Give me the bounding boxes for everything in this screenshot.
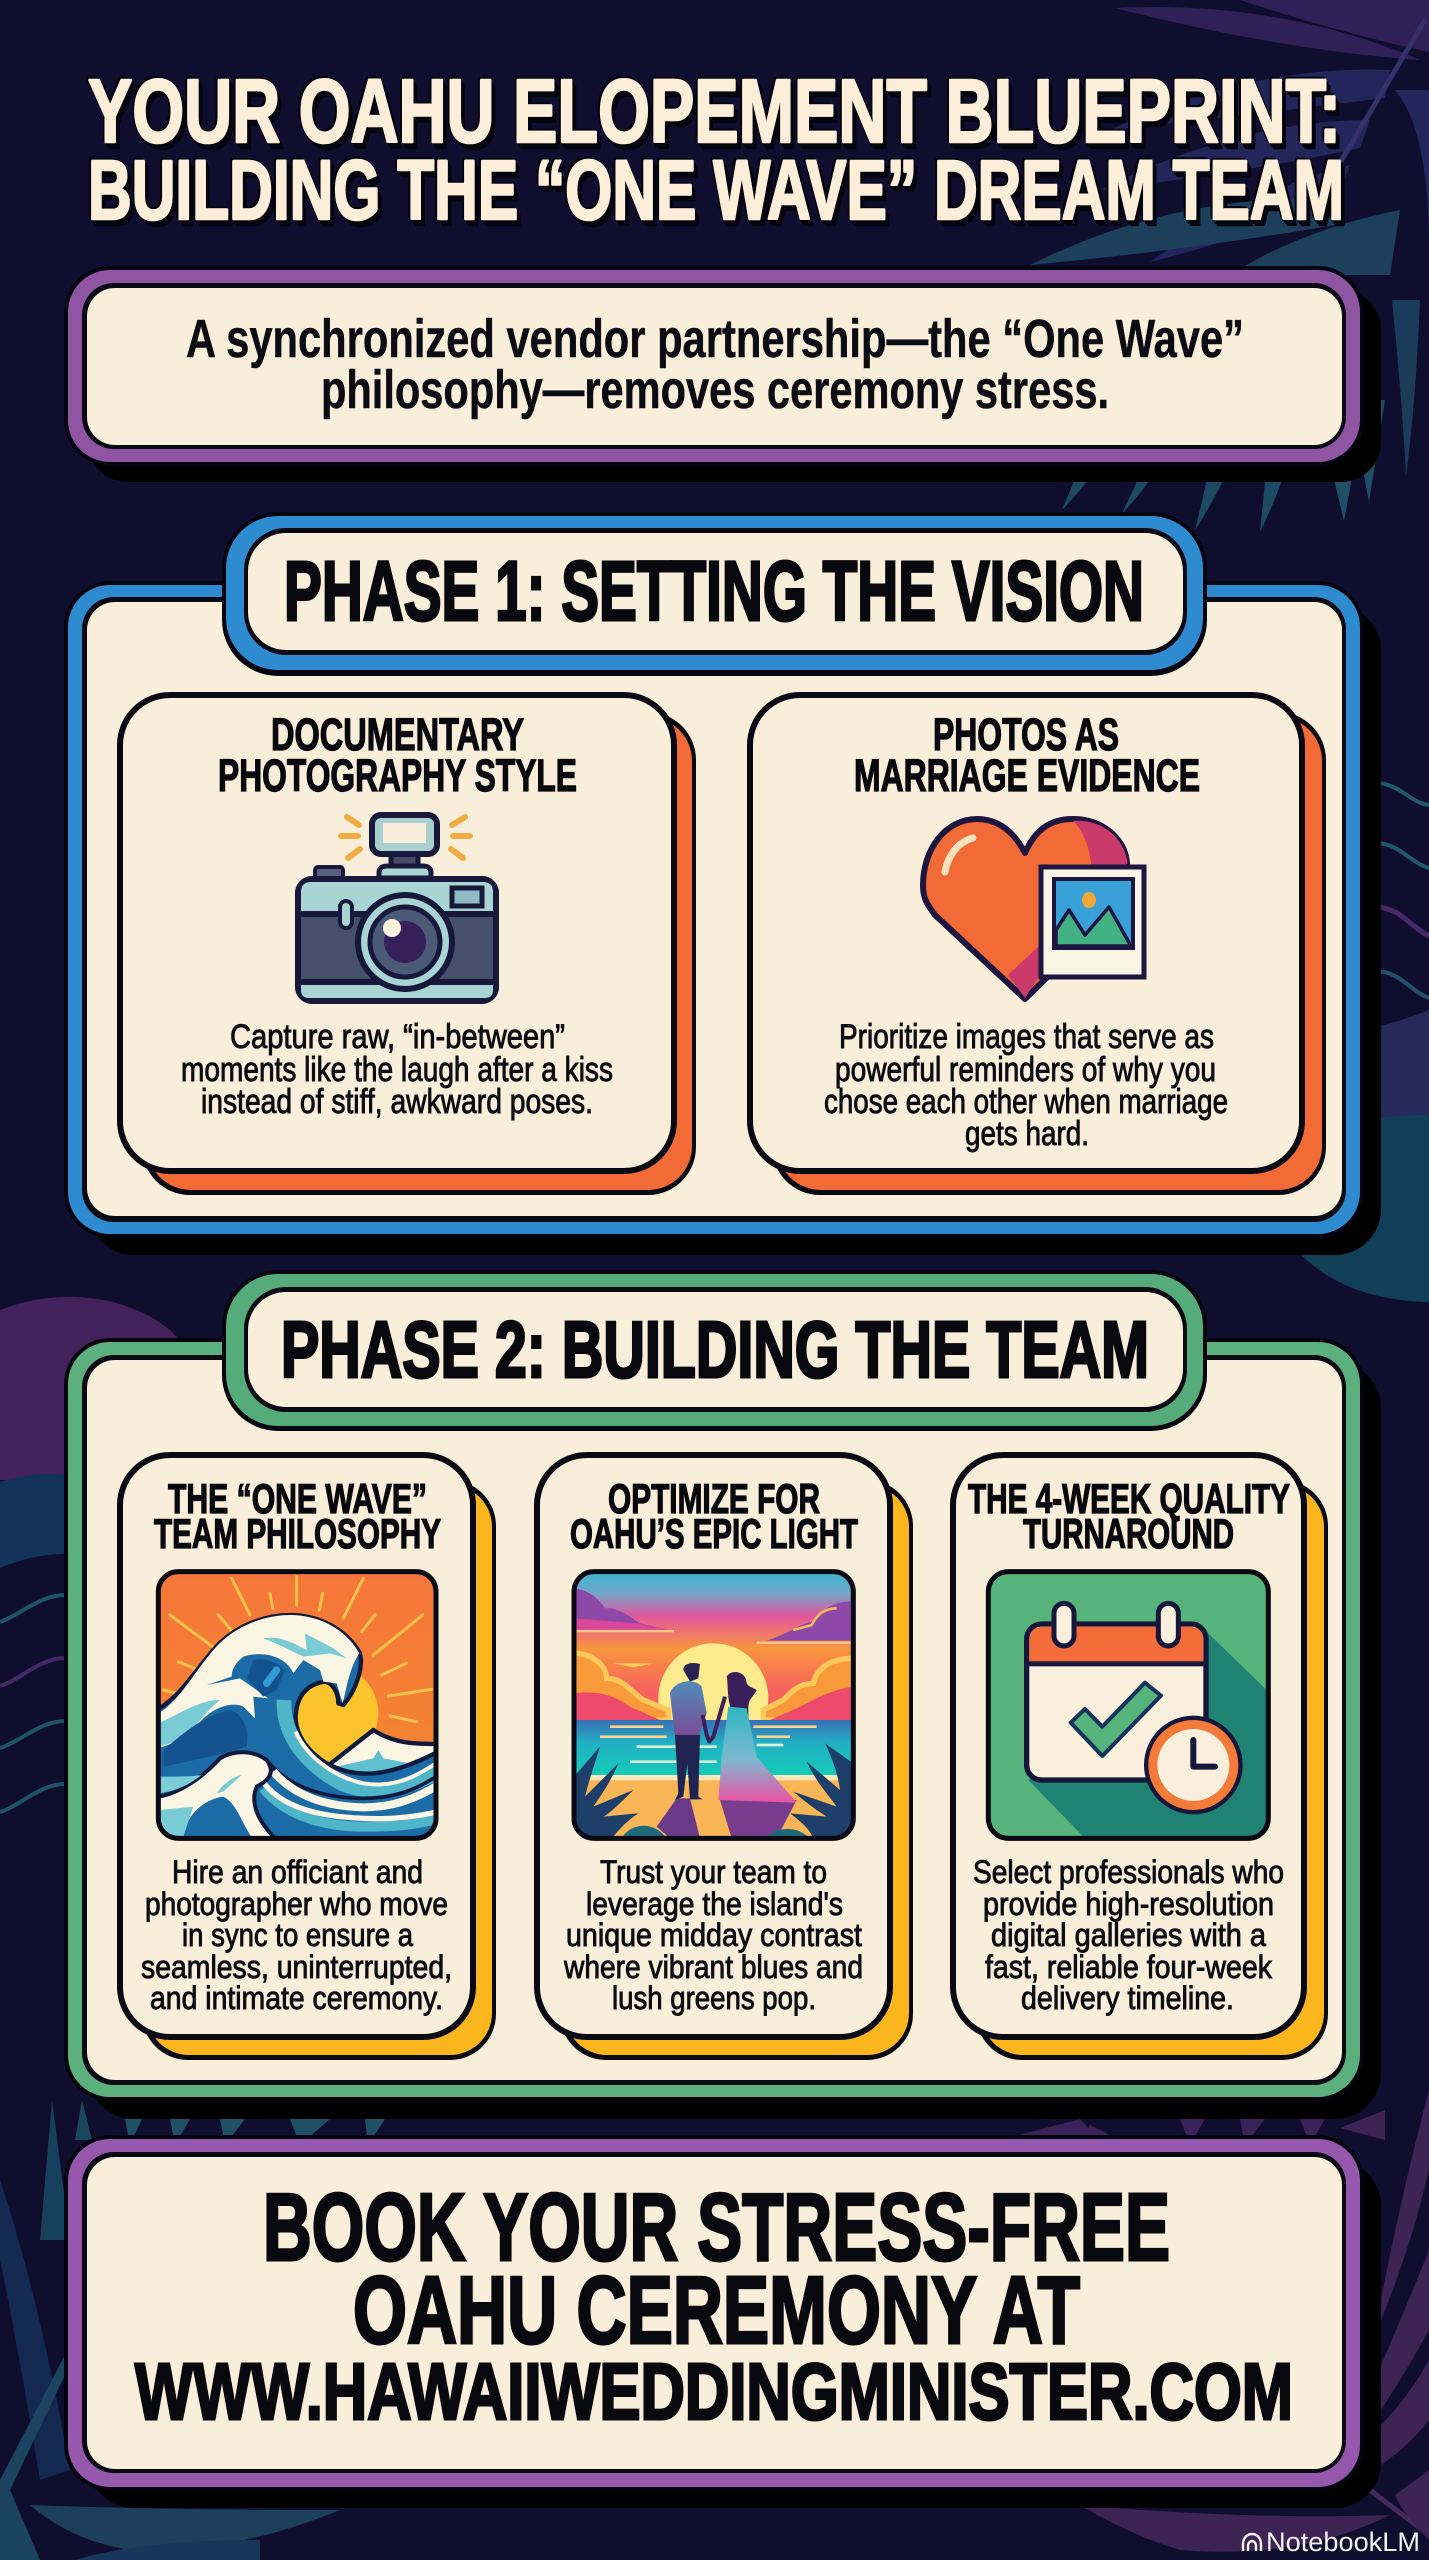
illustration: couple at sunset (574, 1572, 853, 1838)
card body text: photographer who move (145, 1886, 448, 1922)
card heading: PHOTOGRAPHY STYLE (218, 750, 577, 801)
card body text (141, 1854, 452, 2016)
card body text: Capture raw, “in-between” (230, 1018, 565, 1056)
card body text: digital galleries with a (991, 1917, 1266, 1953)
card body text: provide high-resolution (983, 1886, 1274, 1922)
panel: phase 2 (64, 1270, 1381, 2119)
card: photos as marriage evidence (750, 695, 1326, 1195)
panel: phase 1 (64, 512, 1381, 1255)
card heading: MARRIAGE EVIDENCE (854, 750, 1200, 801)
card heading (154, 1475, 441, 1557)
card body text (973, 1854, 1284, 2016)
card body text: unique midday contrast (566, 1917, 862, 1953)
call to action text (135, 2174, 1293, 2436)
card heading: OPTIMIZE FOR (608, 1475, 820, 1522)
card body text: Prioritize images that serve as (839, 1018, 1214, 1056)
card heading (968, 1475, 1290, 1557)
card heading: THE 4-WEEK QUALITY (968, 1475, 1290, 1522)
card body text: leverage the island's (586, 1886, 843, 1922)
card: one wave team philosophy (120, 1455, 496, 2060)
card heading: OAHU’S EPIC LIGHT (570, 1510, 858, 1557)
card body text: where vibrant blues and (563, 1949, 863, 1985)
panel: call to action (64, 2135, 1381, 2508)
card heading: PHOTOS AS (933, 709, 1119, 760)
phase 2 heading tab (222, 1270, 1207, 1431)
card body text: and intimate ceremony. (150, 1980, 443, 2016)
card body text: lush greens pop. (612, 1980, 816, 2016)
illustration: calendar with check and clock (988, 1572, 1268, 1840)
card body text: Select professionals who (973, 1854, 1284, 1890)
card body text: Trust your team to (600, 1854, 827, 1890)
card: optimize for oahu's epic light (537, 1455, 913, 2060)
card heading (570, 1475, 858, 1557)
card body text (181, 1018, 613, 1121)
card body text: gets hard. (965, 1115, 1089, 1153)
card heading (218, 709, 577, 801)
card: documentary photography style (120, 695, 696, 1195)
card body text: delivery timeline. (1021, 1980, 1234, 2016)
card body text: seamless, uninterrupted, (141, 1949, 452, 1985)
card heading: THE “ONE WAVE” (168, 1475, 427, 1522)
card body text (824, 1018, 1228, 1153)
intro text: philosophy—removes ceremony stress. (321, 360, 1109, 420)
card heading: TURNAROUND (1023, 1510, 1234, 1557)
card heading (854, 709, 1200, 801)
card body text: instead of stiff, awkward poses. (201, 1083, 593, 1121)
card body text: moments like the laugh after a kiss (181, 1051, 613, 1089)
illustration: great wave and sun (157, 1572, 438, 1840)
card body text: powerful reminders of why you (835, 1051, 1216, 1089)
panel: intro callout (64, 266, 1381, 482)
phase 1 frame (64, 581, 1381, 1255)
card body text: chose each other when marriage (824, 1083, 1228, 1121)
phase 2 frame (64, 1338, 1381, 2119)
card body text: in sync to ensure a (182, 1917, 413, 1953)
phase 1 heading tab (222, 512, 1207, 676)
card heading: TEAM PHILOSOPHY (154, 1510, 441, 1557)
call to action text: OAHU CEREMONY AT (353, 2257, 1080, 2364)
watermark: NotebookLM: NotebookLM (1266, 2527, 1420, 2557)
card body text: fast, reliable four-week (985, 1949, 1273, 1985)
icon: camera with flash (298, 815, 496, 1001)
title (88, 62, 1344, 237)
card body text (563, 1854, 863, 2016)
card: 4-week quality turnaround (953, 1455, 1328, 2060)
icon: heart with photo (923, 819, 1144, 999)
intro text (186, 309, 1244, 420)
card body text: Hire an officiant and (172, 1854, 423, 1890)
card heading: DOCUMENTARY (271, 709, 524, 760)
